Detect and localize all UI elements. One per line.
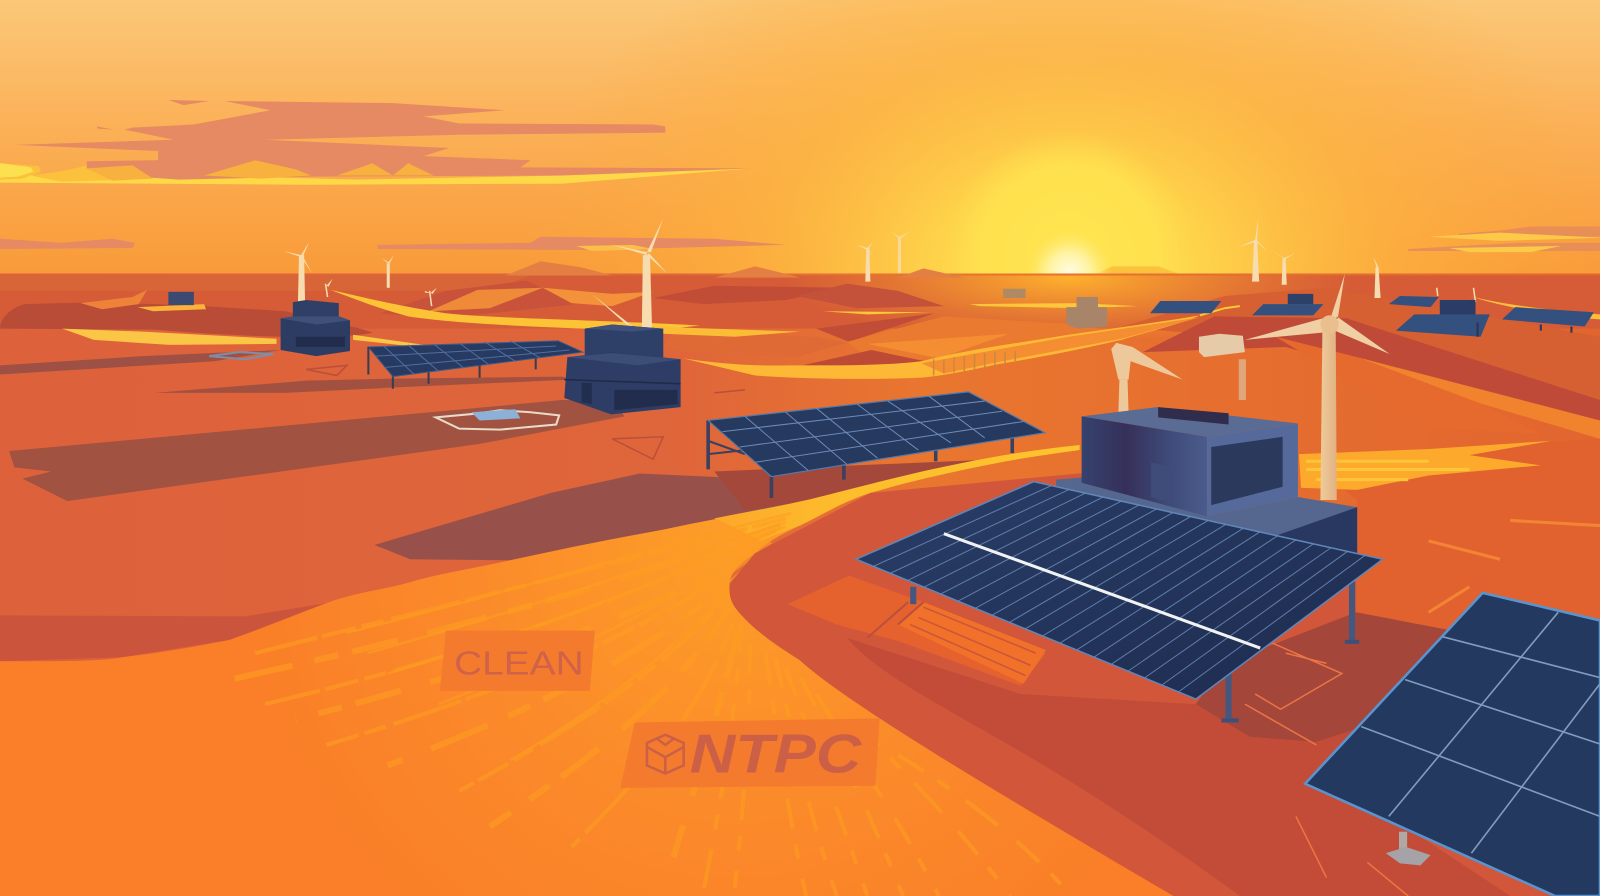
white bus bar [944, 534, 1260, 648]
far building [1288, 294, 1313, 304]
turbine horizon right [1239, 218, 1267, 282]
far panel [1396, 314, 1490, 337]
panel shadow lattice [898, 602, 1046, 684]
logo patch: CLEAN [440, 631, 595, 691]
solar array: middle [708, 392, 1045, 498]
logo patch: NTPC [620, 718, 880, 788]
logo patch: CLEAN: CLEAN [454, 646, 584, 683]
left building [281, 300, 350, 356]
far solar panels and buildings on right [1150, 294, 1594, 337]
far panel [1150, 301, 1221, 313]
far building [1440, 300, 1476, 316]
desert ground base [0, 273, 1600, 896]
ground cable marks [1245, 638, 1342, 745]
road yellow edge [714, 445, 1080, 541]
turbine: large foreground [1245, 273, 1390, 500]
door [1151, 462, 1173, 504]
turbine: rear nacelle [1199, 334, 1246, 400]
legs [913, 582, 1352, 719]
long dark shadows on the sand [0, 350, 976, 661]
roof unit [1158, 407, 1229, 425]
dark shadow pool under main array [1196, 612, 1447, 742]
far building centre [1003, 289, 1026, 298]
platform [1056, 478, 1357, 571]
lit sand left of main array [788, 576, 1046, 686]
solar array: main foreground [856, 482, 1383, 745]
orange sand road [0, 445, 1173, 896]
legs [708, 420, 1012, 498]
right side sand with yellow streak band [1299, 439, 1600, 630]
far buildings [168, 289, 1107, 329]
main building [1056, 407, 1357, 571]
panel surface [856, 482, 1383, 699]
wind turbines in distance [284, 218, 1476, 329]
drone pad marks [209, 352, 745, 459]
distant dunes [0, 261, 1600, 439]
far panel [1252, 304, 1323, 315]
icon: NTPC cube mark [647, 735, 684, 774]
turbine far right [1373, 257, 1384, 298]
sky [0, 0, 1600, 380]
clouds: large left cloud [0, 100, 786, 251]
far building left [168, 292, 194, 305]
terracotta ground between road and main array [729, 469, 1561, 896]
clouds: right distant clouds [1408, 227, 1600, 252]
far panel [1389, 296, 1439, 307]
turbine centre-left [592, 218, 667, 329]
solar panel: corner foreground [1296, 593, 1600, 896]
solar array: back left [368, 341, 583, 389]
tiny turbines [326, 279, 1476, 306]
turbine horizon right two [1272, 251, 1296, 285]
far panel [1502, 307, 1594, 327]
logo patch: NTPC: NTPC [690, 723, 863, 785]
darker sand below main array [847, 638, 1510, 896]
turbine small left [382, 255, 394, 288]
turbine horizon centre two [891, 231, 910, 273]
far building sunlit [1066, 297, 1107, 329]
yellow ridge ribbons [62, 290, 1600, 379]
cell lines [873, 486, 1365, 692]
road streaks [235, 513, 1071, 896]
top face [1082, 407, 1298, 437]
turbine: rear tilted [1111, 343, 1183, 413]
turbine left [284, 242, 312, 302]
turbine horizon centre [857, 241, 873, 282]
centre building [564, 325, 681, 414]
window [1211, 437, 1283, 505]
left face [1082, 416, 1207, 516]
right face [1207, 424, 1298, 516]
background turbines behind main building [1111, 273, 1390, 500]
